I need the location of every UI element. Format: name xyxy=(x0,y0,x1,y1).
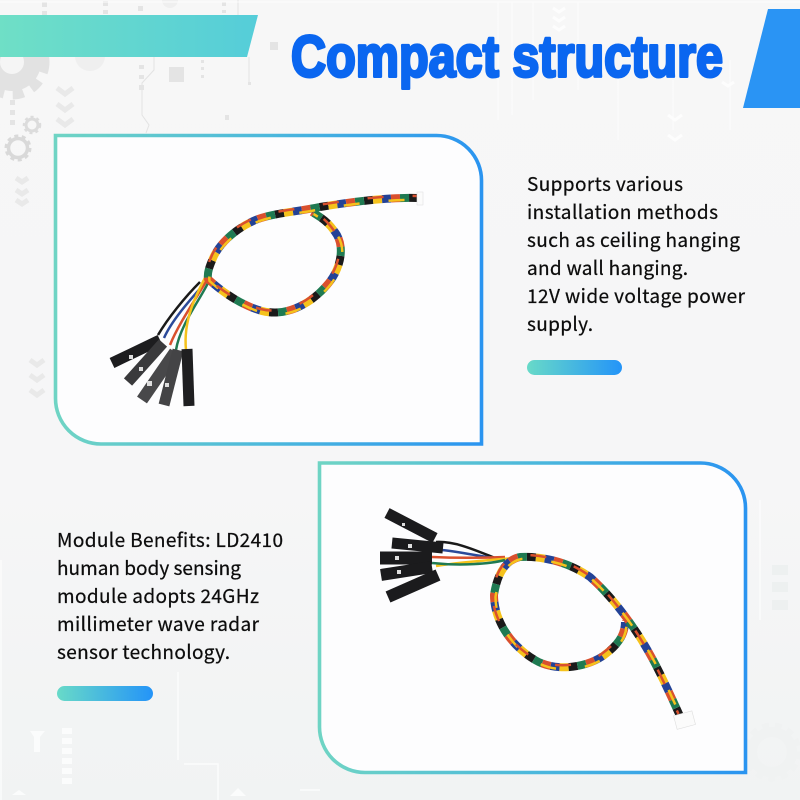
banner: teal left ribbon xyxy=(0,15,258,57)
squares and dots xyxy=(10,1,278,125)
icon: faint arrows xyxy=(12,728,246,796)
icon: medium gear xyxy=(6,136,30,160)
banner: blue right shape xyxy=(743,9,800,108)
text block: installation and power: installation methods xyxy=(527,198,718,225)
text block: installation and power: 12V wide voltage power xyxy=(527,282,746,309)
panel frame xyxy=(56,135,482,444)
text block: installation and power xyxy=(527,170,746,337)
text block: module benefits: millimeter wave radar xyxy=(57,610,260,637)
connector: white header xyxy=(417,192,423,205)
icon: partial gear xyxy=(75,0,178,71)
text block: module benefits: Module Benefits: LD2410 xyxy=(57,526,283,553)
text block: module benefits xyxy=(57,526,283,665)
chevrons xyxy=(16,88,73,395)
wires: twisted bundle xyxy=(206,196,420,315)
text block: module benefits: human body sensing xyxy=(57,554,241,581)
wire harness illustration xyxy=(380,513,696,729)
connector latches xyxy=(129,355,169,387)
icon: faint gear lower right xyxy=(745,725,799,779)
icon: small gear xyxy=(24,117,40,133)
decorative circuit background: upper left xyxy=(0,0,278,395)
icon: large gear xyxy=(0,29,45,95)
panel: upper product photo xyxy=(56,135,482,444)
title: Compact structure xyxy=(291,24,723,90)
text block: installation and power: Supports various xyxy=(527,170,683,197)
circuit lines xyxy=(142,0,249,133)
connector latches xyxy=(395,523,412,574)
text block: installation and power: such as ceiling hanging xyxy=(527,226,740,253)
panel: lower product photo xyxy=(320,463,746,772)
wires: loose tails xyxy=(432,542,515,566)
wires: loose tails xyxy=(158,276,209,350)
decorative chevrons: upper right xyxy=(553,8,734,140)
text block: installation and power: and wall hanging. xyxy=(527,254,688,281)
connectors: dupont housings xyxy=(112,340,189,406)
connectors: dupont housings xyxy=(380,513,443,597)
connector: white header xyxy=(674,711,696,729)
accent pill: lower xyxy=(57,686,153,701)
panel frame xyxy=(320,463,746,772)
wire harness illustration xyxy=(112,192,423,406)
text block: module benefits: module adopts 24GHz xyxy=(57,582,259,609)
text block: module benefits: sensor technology. xyxy=(57,638,230,665)
wires: twisted bundle xyxy=(492,555,682,718)
decorative lower background xyxy=(1,500,799,800)
text block: installation and power: supply. xyxy=(527,310,593,337)
accent pill: upper xyxy=(527,360,622,375)
decorative white lines: upper right xyxy=(0,2,800,140)
